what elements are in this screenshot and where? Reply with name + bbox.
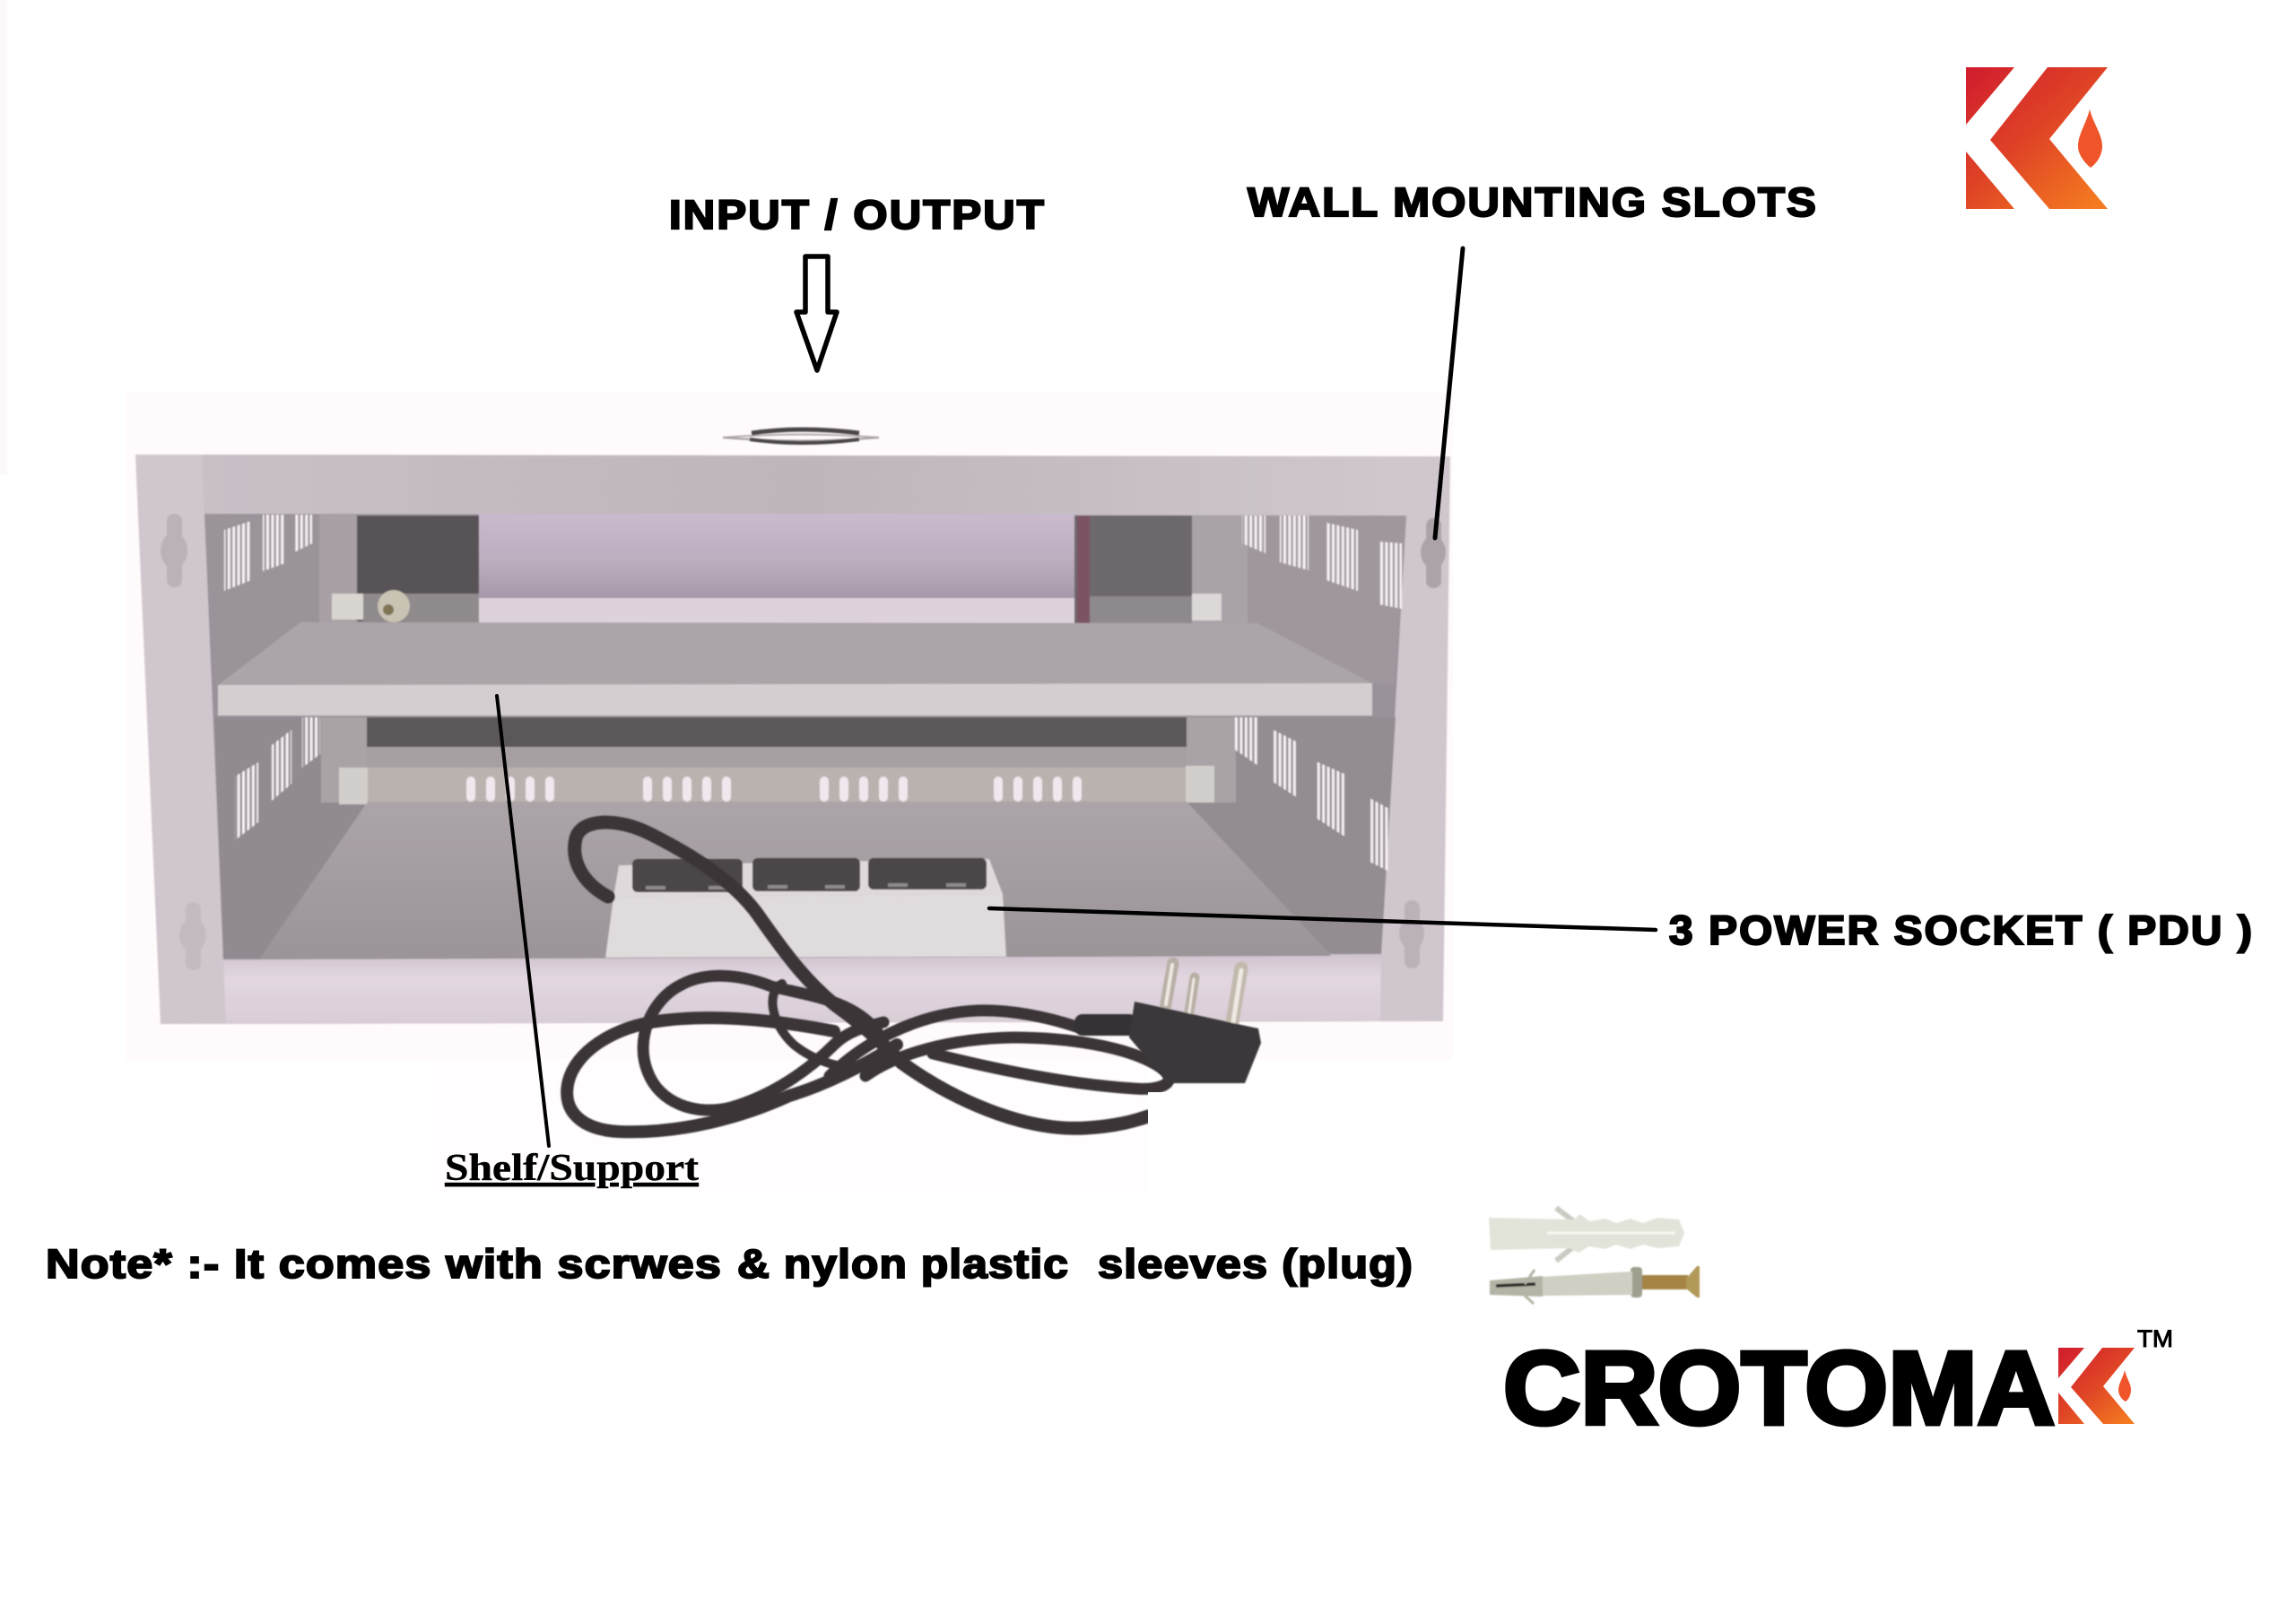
- arrow: input output: [796, 256, 837, 370]
- back panel light band: [479, 598, 1074, 623]
- plug pins: [1165, 963, 1241, 1028]
- keyhole bottom right: [1399, 900, 1424, 968]
- label: power socket: 3 POWER SOCKET ( PDU ): [1669, 907, 2254, 953]
- crotomak wordmark: [1503, 1325, 2173, 1446]
- wordmark text: CROTOMA: [1503, 1330, 2055, 1446]
- lower right vents: [1235, 717, 1389, 872]
- sleeve wings: [1556, 1208, 1583, 1261]
- back panel lower left: [363, 594, 479, 622]
- screw shaft: [1639, 1275, 1688, 1289]
- red cable strip: [1077, 516, 1090, 623]
- socket 2: [752, 858, 860, 891]
- shelf top: [218, 622, 1372, 685]
- rear rail: [367, 747, 1187, 768]
- lower left vents: [235, 717, 320, 840]
- bracket left: [332, 594, 363, 620]
- label: shelf support: Shelf/Support: [445, 1148, 699, 1189]
- fixed sleeve flange: [1631, 1267, 1642, 1298]
- sleeve body: [1489, 1214, 1684, 1253]
- cabinet front frame: [135, 455, 1450, 1024]
- back panel right dark: [1074, 516, 1192, 623]
- socket 3: [868, 858, 987, 890]
- sleeve slit: [1547, 1232, 1675, 1234]
- strain relief: [1074, 1014, 1137, 1036]
- fixed sleeve body: [1541, 1271, 1632, 1296]
- cabinet interior: [204, 514, 1406, 959]
- label: input output: INPUT / OUTPUT: [669, 192, 1046, 238]
- shelf front: [218, 683, 1372, 716]
- logo drop: [2078, 109, 2102, 168]
- leader: power socket: [989, 908, 1656, 930]
- tail slit: [1496, 1284, 1535, 1286]
- power cord: [567, 822, 1169, 1132]
- fixed sleeve wings: [1520, 1270, 1535, 1304]
- leader: shelf support: [497, 696, 549, 1146]
- cord crop patch: [1148, 1092, 1256, 1193]
- bottom lip: [223, 954, 1381, 1024]
- power socket strip: [605, 858, 1006, 958]
- rear perforated strip: [367, 768, 1187, 802]
- left upper vents: [224, 515, 312, 591]
- left edge tint: [0, 0, 7, 475]
- note text: Note* :- It comes with scrwes: [46, 1241, 722, 1287]
- lower left wall: [214, 717, 368, 959]
- logo lower wedge: [1966, 152, 2014, 209]
- keyhole top right: [1421, 518, 1446, 588]
- top right logo: [1966, 67, 2108, 209]
- wordmark K mark: [2058, 1348, 2135, 1424]
- trademark: TM: [2137, 1325, 2173, 1352]
- nylon sleeve plug: [1489, 1208, 1684, 1261]
- note text: & nylon plastic: [737, 1241, 1069, 1287]
- note text: [46, 1241, 1413, 1287]
- plug body: [1129, 1002, 1261, 1083]
- socket slots: [646, 883, 966, 890]
- lower right wall: [1187, 717, 1396, 954]
- top cable hole: [723, 430, 879, 443]
- right post upper: [1192, 516, 1248, 623]
- top panel grain: [430, 457, 1112, 513]
- photo background halo: [126, 392, 1453, 1193]
- keyhole top left: [161, 514, 187, 587]
- screw with sleeve: [1490, 1266, 1700, 1304]
- label: wall mounting slots: WALL MOUNTING SLOTS: [1248, 179, 1818, 225]
- back panel lower right: [1090, 596, 1192, 623]
- right upper wall: [1192, 516, 1406, 685]
- power plug: [1074, 963, 1261, 1083]
- right upper vents: [1242, 516, 1402, 609]
- logo upper wedge: [1966, 67, 2014, 125]
- back panel left dark: [357, 516, 479, 621]
- top panel: [202, 455, 1410, 516]
- post squares: [339, 766, 1214, 804]
- strip top: [613, 859, 1003, 897]
- bolt: [378, 590, 410, 622]
- screw head: [1686, 1266, 1700, 1298]
- bracket right: [1192, 594, 1222, 621]
- strip holes: [471, 781, 1077, 797]
- socket 1: [632, 859, 743, 892]
- lower rear dark band: [367, 717, 1187, 747]
- fixed sleeve tail: [1490, 1276, 1543, 1297]
- note text: sleeves (plug): [1098, 1241, 1413, 1287]
- left upper wall: [204, 514, 357, 685]
- logo chevron: [1990, 67, 2108, 209]
- strip front face: [605, 894, 1006, 958]
- lower right post: [1187, 717, 1236, 803]
- keyhole bottom left: [179, 902, 206, 970]
- left post upper: [319, 515, 357, 622]
- lower left post: [321, 717, 368, 803]
- leader: wall mounting slots: [1435, 248, 1463, 538]
- wall mount cabinet: [135, 430, 1450, 1024]
- cabinet floor: [259, 802, 1331, 959]
- back panel lavender: [479, 514, 1074, 598]
